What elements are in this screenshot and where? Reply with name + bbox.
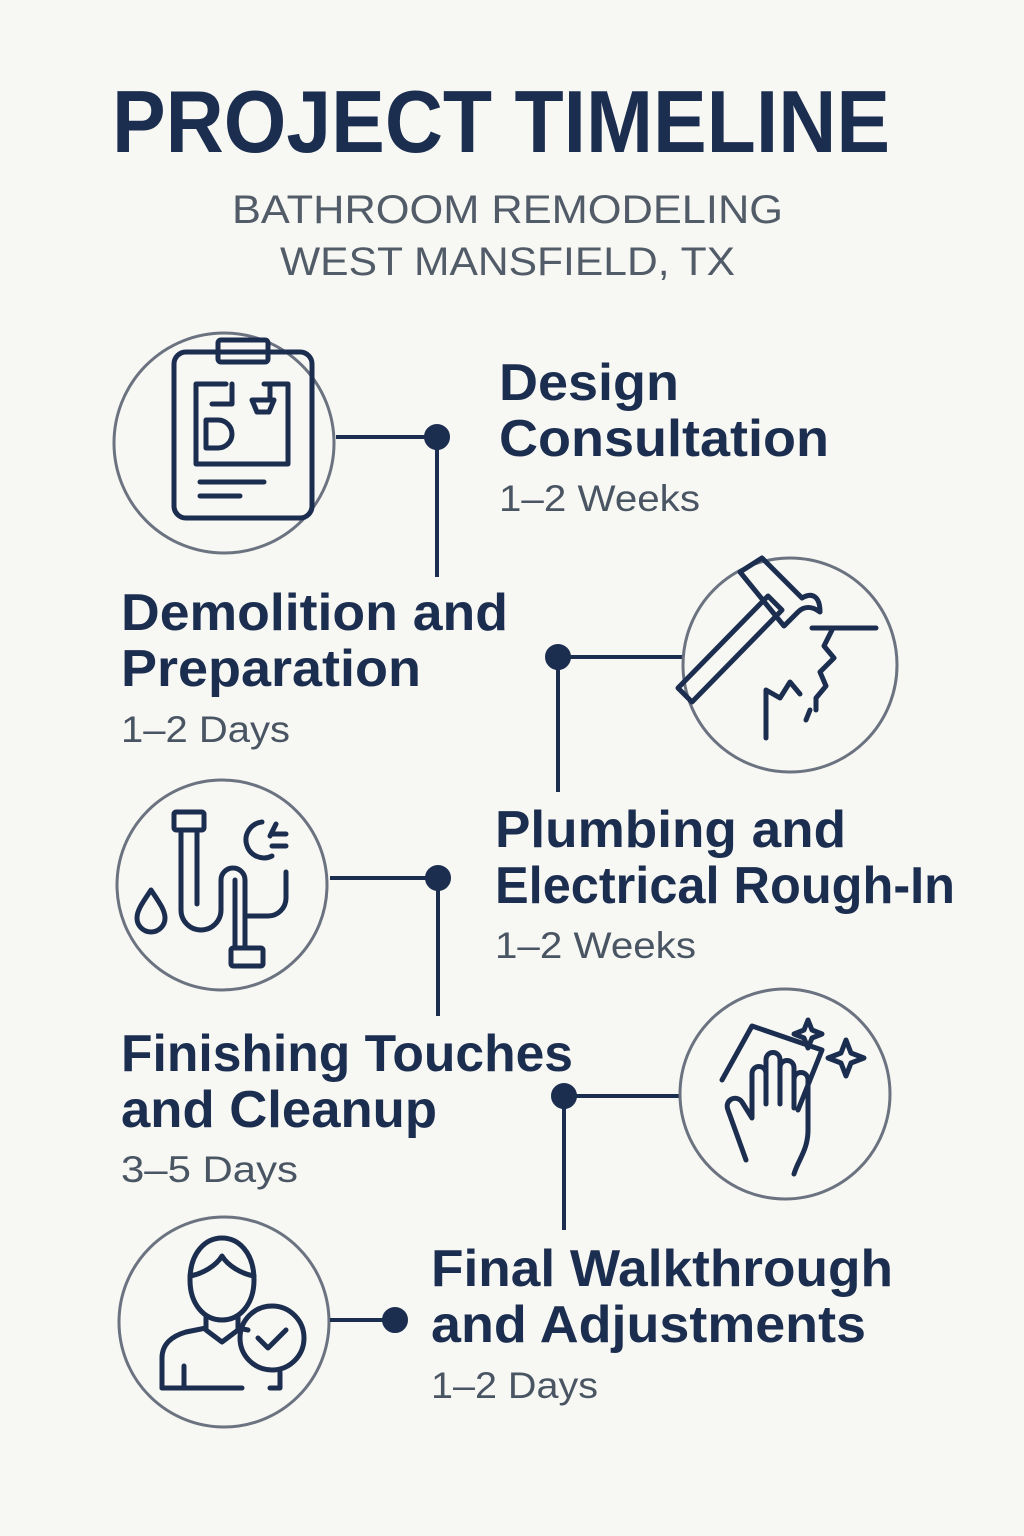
text: final walkthrough: and Adjustments [431,1296,866,1354]
subtitle: BATHROOM REMODELING [232,188,783,232]
step 2: demolition [121,558,897,792]
text: demolition: Demolition and [121,584,508,642]
text: design consultation: 1–2 Weeks [499,478,700,519]
text: finishing: Finishing Touches [121,1025,573,1083]
text: plumbing: Electrical Rough-In [495,857,955,915]
text: plumbing: Plumbing and [495,801,846,859]
text: design consultation: Design [499,354,679,412]
text: final walkthrough: 1–2 Days [431,1365,598,1406]
connector 2 [547,646,683,792]
subtitle: WEST MANSFIELD, TX [280,240,735,284]
text: finishing: 3–5 Days [121,1149,298,1190]
text: demolition: Preparation [121,640,421,698]
text: design consultation [499,354,829,519]
step 4: finishing [121,989,890,1230]
step 5: final walkthrough [119,1217,893,1427]
connector 1 [336,426,448,577]
step 1: design consultation [114,333,829,577]
icon: clipboard [114,333,334,553]
icon: pipes [117,780,327,990]
text: demolition: 1–2 Days [121,709,290,750]
icon: person with check [119,1217,329,1427]
connector 5 [330,1309,406,1331]
text: final walkthrough [431,1240,893,1406]
connector 3 [330,867,449,1016]
step 3: plumbing [117,780,955,1016]
text: final walkthrough: Final Walkthrough [431,1240,893,1298]
icon: cleaning hand [680,989,890,1199]
text: demolition [121,584,508,750]
text: finishing [121,1025,573,1190]
subtitle [232,188,783,284]
text: plumbing [495,801,955,966]
icon: hammer [678,558,897,772]
text: plumbing: 1–2 Weeks [495,925,696,966]
connector 4 [553,1085,680,1230]
text: finishing: and Cleanup [121,1081,437,1139]
title: PROJECT TIMELINE [112,72,890,171]
text: design consultation: Consultation [499,410,829,468]
